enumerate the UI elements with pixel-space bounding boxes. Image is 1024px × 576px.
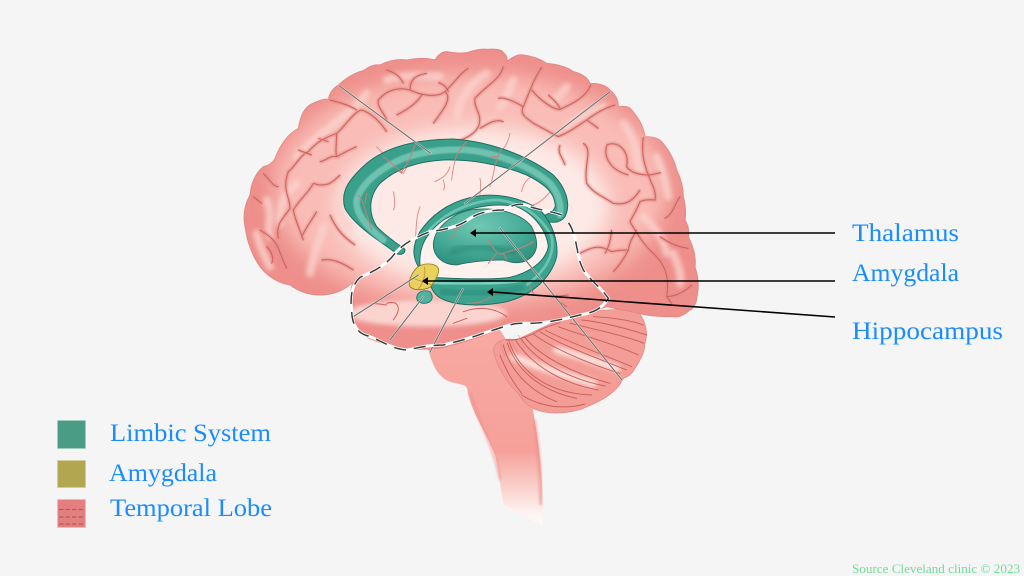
arrow: amygdala xyxy=(422,277,835,285)
legend label: temporal lobe: Temporal Lobe xyxy=(110,495,272,522)
temporal lobe dashed outline xyxy=(351,204,608,350)
grey leader lines xyxy=(339,86,622,380)
label: Thalamus: Thalamus xyxy=(852,220,959,247)
faint vessels inside xyxy=(376,132,550,240)
brain cerebrum xyxy=(244,49,698,349)
sulcus shadow xyxy=(253,67,692,303)
brain inner glow xyxy=(257,73,681,327)
legend label: amygdala: Amygdala xyxy=(109,460,217,487)
label: Hippocampus: Hippocampus xyxy=(852,318,1003,345)
amygdala shape xyxy=(409,264,439,290)
sulcus lines xyxy=(253,67,692,303)
label: Amygdala: Amygdala xyxy=(852,260,959,287)
limbic system: fornix and hippocampus ring xyxy=(414,195,557,305)
arrow: hippocampus xyxy=(487,288,835,317)
cerebellum xyxy=(493,310,647,413)
legend label: limbic system: Limbic System xyxy=(110,420,272,447)
legend xyxy=(58,420,272,528)
interior of fornix ring xyxy=(420,205,548,279)
small green bulb xyxy=(417,291,432,303)
temporal lobe sulci xyxy=(373,290,569,324)
legend swatch: limbic system xyxy=(58,420,86,448)
legend swatch: temporal lobe xyxy=(58,500,86,528)
brainstem xyxy=(425,330,543,526)
source credit: Source Cleveland clinic © 2023 xyxy=(852,562,1020,576)
arrow: thalamus xyxy=(470,229,835,237)
thalamus xyxy=(433,209,537,265)
limbic system: cingulate band xyxy=(344,139,568,254)
legend swatch: amygdala xyxy=(58,460,86,488)
